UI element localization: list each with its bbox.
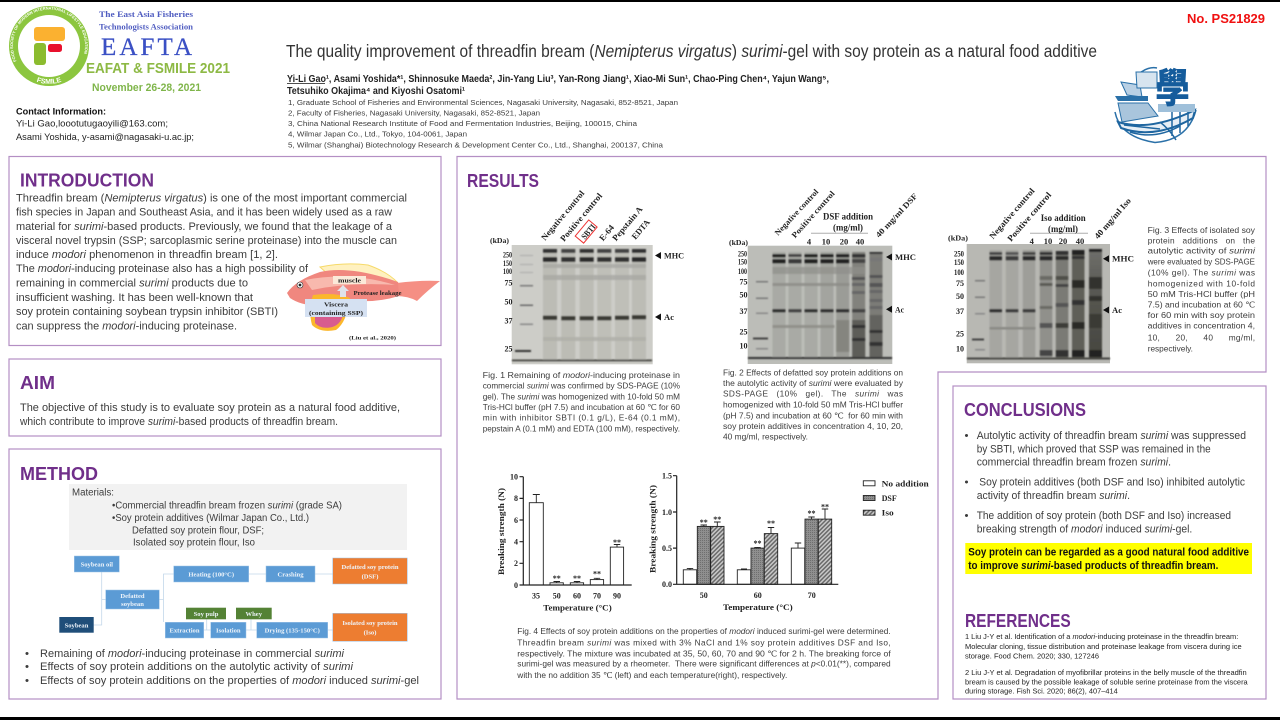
conference date: November 26-28, 2021	[92, 82, 201, 94]
flowchart: soy protein production: (DSF)	[362, 574, 378, 580]
conclusions bullet list: The addition of soy protein (both DSF and Iso) increased	[977, 510, 1231, 522]
heading: method: METHOD	[20, 464, 98, 484]
chart legend	[863, 479, 929, 518]
left chart labels: **	[593, 570, 601, 578]
affiliations: 5, Wilmar (Shanghai) Biotechnology Research & Development Center Co., Ltd., Shanghai, 200137, China	[288, 140, 664, 150]
figure 1: caption: Tris-HCl buffer (pH 7.5) and incubation at 60 ℃ for 60	[483, 402, 680, 412]
left chart labels: 2	[514, 559, 518, 568]
association name: The East Asia Fisheries	[99, 9, 194, 19]
method bullet list: Remaining of modori-inducing proteinase in commercial surimi	[40, 648, 344, 660]
figure 2: lane labels: 20	[840, 236, 848, 246]
left chart labels: 90	[613, 592, 621, 600]
figure 3: lane labels: Positive control	[1005, 189, 1054, 243]
figure 2: lane labels: 4	[807, 236, 812, 246]
figure 3: lane labels: 4	[1030, 236, 1035, 246]
flowchart: soy protein production: Drying (135-150°C)	[265, 628, 320, 634]
figure 3: lane labels: 40	[1076, 236, 1084, 246]
figure 1: band markers	[655, 252, 684, 322]
figure 3: axis labels: 37	[956, 307, 964, 316]
affiliations: 1, Graduate School of Fisheries and Environmental Sciences, Nagasaki University, Nagasaki, 852-8521, Japan	[288, 98, 678, 107]
figure 2: lane labels: Negative control	[773, 187, 821, 237]
figure 3: caption: 7.5) and incubation at 60 ℃	[1148, 299, 1255, 309]
figure 3: axis labels: 25	[956, 330, 964, 338]
figure 3: axis labels: 50	[956, 292, 964, 301]
figure 2: axis labels: 37	[740, 307, 748, 316]
references list: storage. Food Chem. 2020; 330, 127246	[965, 652, 1099, 660]
association name: Technologists Association	[99, 22, 193, 32]
figure 3: caption: for 60 min with soy protein	[1148, 310, 1255, 320]
right chart labels: 50	[700, 591, 708, 600]
right chart labels: **	[700, 518, 708, 527]
figure 1: lane labels: Pepstain A	[610, 203, 645, 243]
conclusions bullet list: commercial threadfin bream frozen surimi.	[977, 457, 1171, 469]
figure 2: caption: soy protein additives in concentration 4, 10, 20,	[723, 421, 903, 431]
left chart labels: 10	[510, 472, 518, 482]
right chart labels: 0.5	[662, 544, 672, 553]
figure 2: caption	[723, 368, 904, 442]
affiliations: 2, Faculty of Fisheries, Nagasaki University, Nagasaki, 852-8521, Japan	[288, 108, 540, 118]
method bullet list: •	[25, 675, 29, 687]
figure 1: lane labels: E-64	[597, 222, 617, 243]
left chart labels: **	[613, 538, 621, 547]
figure 1: gel	[490, 188, 684, 364]
figure 2: band markers	[886, 253, 916, 314]
right chart labels: Temperature (°C)	[723, 602, 793, 612]
text block: introduction	[16, 193, 407, 333]
affiliations: 3, China National Research Institute of Food and Fermentation Industries, Beijing, 100015, China	[288, 119, 638, 128]
conclusions bullet list: •	[964, 510, 968, 522]
figure 1: lane labels	[539, 188, 652, 243]
left chart labels: 8	[514, 494, 518, 503]
figure 1: band markers: MHC	[664, 252, 684, 260]
left chart labels: **	[553, 574, 561, 583]
text block: introduction: Threadfin bream (Nemipterus virgatus) is one of the most important commercial	[16, 193, 407, 205]
icon: university seal	[1115, 56, 1196, 142]
icon: FSMILE logo: FOOD SOCIETY OF MODERN INTERNATIONAL LIFESTYLE EDUCATION	[10, 6, 88, 62]
icon: university seal: 學	[1156, 56, 1190, 114]
references list: Molecular cloning, tissue distribution and proteinase leakage from viscera during ice	[965, 643, 1242, 651]
materials box: Materials:	[72, 488, 114, 498]
figure 2: axis labels: 25	[740, 328, 748, 336]
figure 1: lane labels: Negative control	[539, 188, 587, 242]
flowchart: soy protein production: Soy pulp	[194, 611, 219, 618]
left chart labels: 0	[514, 581, 518, 590]
right chart labels: **	[713, 515, 721, 524]
left chart labels: Temperature (°C)	[543, 602, 612, 612]
figure 2: axis labels: 250	[738, 250, 747, 258]
figure 3: axis labels: 75	[956, 279, 964, 288]
left chart labels: 4	[514, 538, 518, 546]
figure 1: lane labels: EDTA	[629, 217, 652, 241]
panel: conclusions and references	[953, 386, 1266, 699]
affiliations	[288, 98, 678, 150]
flowchart: soy protein production: Heating (100°C)	[188, 572, 234, 578]
flowchart: soy protein production: Soybean oil	[81, 562, 113, 568]
figure 3: caption	[1147, 225, 1256, 353]
figure 4: caption: Threadfin bream surimi was mixed with 3% NaCl and 1% soy protein additives DSF and Iso,	[517, 637, 891, 647]
figure 3: band markers: Ac	[1112, 306, 1122, 315]
contact information	[16, 106, 194, 142]
figure 4: caption	[516, 626, 891, 680]
figure 3: caption: 50 mM Tris-HCl buffer (pH	[1148, 289, 1255, 299]
conference name: EAFAT & FSMILE 2021	[86, 61, 230, 77]
method bullet list: •	[25, 661, 29, 673]
figure 3: axis labels: 10	[956, 344, 964, 354]
figure 1: axis labels: 150	[503, 259, 512, 268]
icon: fish diagram: muscle	[338, 278, 362, 284]
chart: breaking strength vs temperature	[496, 472, 929, 612]
figure 2: caption: SDS-PAGE (10% gel). The surimi was	[723, 388, 903, 398]
poster number: No. PS21829	[1187, 11, 1265, 26]
figure 3: axis labels: 100	[954, 268, 964, 277]
figure 1: axis labels	[490, 237, 512, 354]
icon: fish diagram	[287, 264, 440, 342]
figure 3: caption: (10% gel). The surimi was	[1148, 268, 1255, 278]
figure 4: caption: with the no addition 35 ℃ (left) and each temperature(right), respectively.	[516, 670, 787, 680]
figure 3: lane labels: Negative control	[987, 185, 1037, 241]
right chart labels: **	[808, 509, 816, 518]
bottom black bar	[0, 717, 1280, 720]
callout: main conclusion: Soy protein can be regarded as a good natural food additive	[968, 546, 1249, 558]
figure 3: caption: protein additions on the	[1148, 236, 1255, 246]
figure 1: axis labels: (kDa)	[490, 237, 510, 245]
authors: Yi-Li Gao¹, Asami Yoshida*¹, Shinnosuke Maeda², Jin-Yang Liu³, Yan-Rong Jiang¹, Xiao-Mi Sun¹, Chao-Ping Chen⁴, Yajun Wang⁵,	[287, 74, 829, 85]
figure 3: caption: autolytic activity of surimi	[1148, 246, 1256, 256]
panel: results outline	[457, 156, 1266, 699]
figure 2: axis labels: 100	[738, 267, 747, 276]
left chart labels: 6	[514, 516, 518, 525]
association name: EAFTA	[101, 34, 192, 61]
figure 3: axis labels: (kDa)	[948, 235, 969, 243]
right chart bars	[683, 509, 832, 584]
flowchart: soy protein production: (Iso)	[364, 630, 376, 636]
figure 2: lane labels	[773, 187, 919, 246]
figure 2: lane labels: DSF addition	[823, 212, 873, 222]
figure 1: caption: gel). The surimi was homogenized with 10-fold 50 mM	[483, 392, 680, 402]
panel: aim	[9, 359, 441, 436]
right chart labels	[648, 472, 829, 612]
right chart labels: **	[754, 539, 762, 548]
figure 2: caption: 40 mg/ml, respectively.	[723, 432, 808, 442]
text block: introduction: material for surimi-based products. Previously, we found that the leakage of a	[16, 221, 393, 233]
left chart labels: 50	[553, 592, 561, 600]
panel: method	[9, 449, 441, 699]
text block: introduction: The modori-inducing proteinase also has a high possibility of	[16, 263, 309, 275]
figure 2: caption: homogenized with 10-fold 50 mM Tris-HCl buffer	[723, 399, 903, 409]
right chart labels: 0.0	[662, 580, 672, 589]
text block: introduction: remaining in commercial surimi products due to	[16, 278, 248, 290]
conclusions bullet list: breaking strength of modori induced surimi-gel.	[977, 523, 1192, 535]
materials box: •Commercial threadfin bream frozen surimi (grade SA)	[112, 500, 342, 512]
heading: references: REFERENCES	[965, 611, 1071, 631]
flowchart: soy protein production: Whey	[246, 611, 263, 618]
figure 1: axis labels: 250	[503, 250, 512, 260]
figure 4: caption: surimi-gel was measured by a rheometer. There were significant differences at p<0.01(**), compared	[517, 659, 891, 669]
authors: Tetsuhiko Okajima⁴ and Kiyoshi Osatomi¹	[287, 86, 465, 97]
figure 2: axis labels	[729, 239, 749, 350]
figure 3: axis labels: 150	[954, 258, 964, 267]
right chart labels: **	[821, 502, 829, 512]
text block: introduction: can suppress the modori-inducing proteinase.	[16, 321, 237, 333]
icon: fish diagram: Viscera	[324, 302, 348, 308]
figure 2: lane labels: 40 mg/ml DSF	[874, 191, 919, 239]
materials box: •Soy protein additives (Wilmar Japan Co., Ltd.)	[112, 513, 309, 524]
figure 3: band markers: MHC	[1112, 255, 1134, 264]
conclusions bullet list: •	[964, 477, 968, 489]
figure 1: axis labels: 100	[503, 267, 512, 276]
left chart labels: **	[573, 574, 581, 583]
text block: introduction: visceral novel trypsin (SSP; sarcoplasmic serine proteinase) into the muscle can	[16, 235, 397, 247]
figure 3: lane labels: 40 mg/ml Iso	[1092, 196, 1133, 241]
references list: bream is caused by the possible leakage of soluble serine proteinase from the viscera	[965, 678, 1248, 686]
text block: aim: which contribute to improve surimi-based products of threadfin bream.	[19, 416, 338, 428]
figure 2: lane labels: (mg/ml)	[833, 222, 863, 232]
materials box	[69, 484, 407, 550]
heading: results: RESULTS	[467, 171, 539, 191]
figure 3: caption: were evaluated by SDS-PAGE	[1147, 257, 1255, 267]
flowchart: soy protein production: Isolation	[216, 628, 241, 634]
figure 3: lane labels: 20	[1059, 236, 1067, 246]
references list: 2 Liu J-Y et al. Degradation of myofibrillar proteins in the belly muscle of the threadfin	[965, 669, 1247, 677]
affiliations: 4, Wilmar Japan Co., Ltd., Tokyo, 104-0061, Japan	[288, 130, 467, 139]
contact information: Contact Information:	[16, 106, 106, 116]
left chart bars	[529, 494, 624, 585]
icon: fish diagram: (containing SSP)	[309, 310, 363, 317]
right chart labels: 1.0	[662, 508, 672, 517]
figure 2: band markers: MHC	[895, 253, 916, 262]
figure 1: axis labels: 37	[504, 316, 512, 326]
right chart labels: 70	[808, 591, 816, 600]
callout: main conclusion: to improve surimi-based products of threadfin bream.	[968, 560, 1218, 572]
materials box: Isolated soy protein flour, Iso	[133, 538, 255, 548]
figure 1: axis labels: 75	[504, 278, 512, 288]
text block: introduction: induce modori phenomenon in threadfin bream [1, 2].	[16, 249, 278, 261]
text block: introduction: insufficient washing. It has been well-known that	[16, 292, 254, 304]
text block: aim: The objective of this study is to evaluate soy protein as a natural food additive,	[20, 402, 400, 414]
figure 3: caption: Fig. 3 Effects of isolated soy	[1148, 225, 1256, 235]
text block: aim	[19, 402, 400, 428]
association name	[99, 9, 194, 61]
figure 2: gel	[729, 187, 919, 364]
chart legend: DSF	[882, 494, 897, 503]
figure 2: lane labels: 40	[856, 236, 864, 246]
figure 3: lane labels: (mg/ml)	[1048, 224, 1078, 234]
contact information: Asami Yoshida, y-asami@nagasaki-u.ac.jp;	[16, 131, 194, 142]
icon: fish diagram: (Liu et al., 2020)	[349, 336, 396, 342]
right chart labels: 60	[754, 591, 762, 600]
contact information: Yi-Li Gao,loootutugaoyili@163.com;	[16, 118, 168, 128]
figure 3: caption: additives in concentration 4,	[1148, 321, 1255, 331]
figure 4: caption: Fig. 4 Effects of soy protein additions on the properties of modori induced surimi-gel were determined.	[517, 626, 891, 636]
flowchart: soy protein production: Defatted	[120, 593, 145, 600]
left chart axes	[520, 477, 632, 585]
figure 1: caption	[483, 370, 681, 434]
materials box: Defatted soy protein flour, DSF;	[132, 526, 264, 536]
figure 2: caption: the autolytic activity of surimi were evaluated by	[723, 378, 904, 388]
right chart axes	[673, 476, 838, 584]
icon: FSMILE logo: FSMILE	[36, 77, 62, 84]
figure 1: lane labels: SBTI	[579, 221, 598, 241]
icon: fish diagram: Protease leakage	[354, 291, 402, 297]
figure 2: axis labels: 50	[740, 290, 748, 300]
figure 2: caption: Fig. 2 Effects of defatted soy protein additions on	[723, 368, 903, 378]
figure 2: axis labels: 150	[738, 258, 747, 266]
figure 3: gel	[948, 185, 1134, 363]
flowchart: soy protein production	[59, 556, 407, 641]
title: The quality improvement of threadfin bream (Nemipterus virgatus) surimi-gel with soy protein as a natural food additive	[286, 41, 1097, 61]
figure 1: axis labels: 50	[504, 298, 512, 306]
figure 4: caption: respectively. The mixture was incubated at 35, 50, 60, 70 and 90 ℃ for 2 h. The breaking force of	[517, 648, 891, 658]
chart legend: Iso	[882, 509, 894, 518]
method bullet list	[25, 648, 419, 687]
figure 2: axis labels: (kDa)	[729, 239, 749, 247]
figure 1: caption: pepstain A (0.1 mM) and EDTA (100 mM), respectively.	[483, 424, 680, 434]
left chart labels: 35	[532, 592, 540, 600]
flowchart: soy protein production: Crashing	[277, 572, 304, 578]
method bullet list: Effects of soy protein additions on the autolytic activity of surimi	[40, 661, 353, 673]
left chart labels: 60	[573, 592, 581, 600]
figure 3: caption: homogenized with 10-fold	[1148, 278, 1255, 288]
figure 2: caption: (pH 7.5) and incubation at 60 ℃ for 60 min with	[723, 411, 903, 421]
chart legend: No addition	[882, 479, 929, 488]
flowchart: soy protein production: Isolated soy protein	[342, 620, 398, 627]
figure 2: band markers: Ac	[895, 305, 904, 314]
figure 3: lane labels	[987, 185, 1133, 246]
figure 3: caption: respectively.	[1148, 343, 1193, 353]
figure 1: lane labels: Positive control	[558, 190, 605, 243]
figure 2: axis labels: 75	[740, 278, 748, 286]
left chart labels	[496, 472, 621, 612]
references list: 1 Liu J-Y et al. Identification of a modori-inducing proteinase in the threadfin bream:	[965, 633, 1238, 641]
callout: main conclusion	[965, 543, 1252, 574]
figure 1: caption: Fig. 1 Remaining of modori-inducing proteinase in	[483, 370, 680, 380]
references list	[965, 633, 1248, 695]
right chart labels: Breaking strength (N)	[648, 485, 658, 573]
left chart labels: Breaking strength (N)	[496, 488, 506, 575]
references list: during storage. Fish Sci. 2020; 86(2), 407–414	[965, 687, 1118, 695]
figure 3: lane labels: Iso addition	[1041, 213, 1086, 223]
figure 2: lane labels: 10	[822, 236, 830, 246]
authors	[287, 74, 829, 97]
method bullet list: Effects of soy protein additions on the properties of modori induced surimi-gel	[40, 675, 419, 687]
figure 3: axis labels	[948, 235, 969, 354]
conclusions bullet list	[964, 430, 1246, 535]
flowchart: soy protein production: Defatted soy protein	[341, 564, 399, 571]
conclusions bullet list: by SBTI, which proved that SSP was remained in the	[977, 443, 1211, 455]
method bullet list: •	[25, 648, 29, 660]
heading: conclusions: CONCLUSIONS	[964, 400, 1086, 420]
top black bar	[0, 0, 1280, 2]
figure 2: axis labels: 10	[740, 342, 748, 350]
flowchart: soy protein production: Soybean	[65, 622, 89, 630]
figure 1: caption: min with inhibitor SBTI (0.1 g/L), E-64 (0.1 mM),	[483, 413, 680, 423]
flowchart: soy protein production: soybean	[121, 601, 144, 608]
panel: introduction	[9, 156, 441, 346]
text block: introduction: soy protein containing soybean trypsin inhibitor (SBTI)	[16, 306, 278, 318]
figure 3: lane labels: 10	[1044, 236, 1052, 246]
figure 3: axis labels: 250	[954, 250, 964, 258]
heading: aim: AIM	[20, 373, 55, 393]
figure 3: caption: 10, 20, 40 mg/ml,	[1148, 332, 1255, 342]
figure 1: axis labels: 25	[504, 344, 512, 354]
conclusions bullet list: Soy protein additives (both DSF and Iso) inhibited autolytic	[979, 477, 1245, 489]
right chart labels: 1.5	[662, 472, 672, 480]
text block: introduction: fish species in Japan and Southeast Asia, and it has been widely used as a raw	[16, 207, 393, 219]
figure 2: lane labels: Positive control	[790, 189, 837, 240]
figure 1: caption: commercial surimi was confirmed by SDS-PAGE (10%	[483, 381, 681, 391]
conclusions bullet list: Autolytic activity of threadfin bream surimi was suppressed	[977, 430, 1246, 442]
figure 1: band markers: Ac	[664, 313, 674, 322]
heading: introduction: INTRODUCTION	[20, 170, 154, 190]
conclusions bullet list: •	[964, 430, 968, 442]
flowchart: soy protein production: Extraction	[169, 628, 200, 634]
left chart labels: 70	[593, 592, 601, 600]
conclusions bullet list: activity of threadfin bream surimi.	[977, 490, 1130, 502]
figure 3: band markers	[1103, 255, 1134, 315]
right chart labels: **	[767, 519, 775, 528]
